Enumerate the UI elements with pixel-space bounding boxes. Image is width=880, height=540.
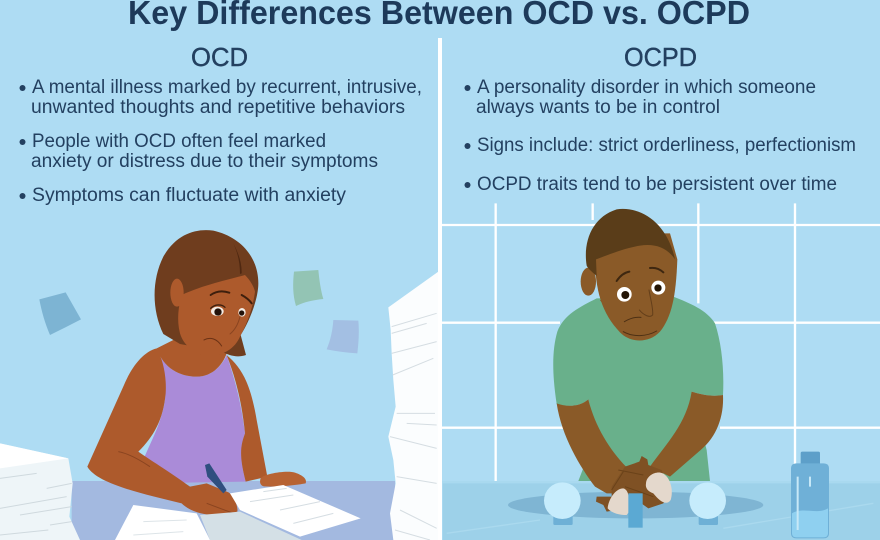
- hands: [596, 456, 670, 512]
- sticky note blue: [39, 292, 81, 335]
- face: [595, 233, 677, 341]
- bullet 2: Signs include: strict orderliness, perfectionism: [477, 135, 856, 156]
- bullet 3: OCPD traits tend to be persistent over time: [477, 174, 837, 195]
- sticky note purple: [327, 320, 359, 353]
- eyes: [211, 307, 246, 317]
- panel divider: [438, 38, 442, 540]
- ear: [581, 268, 596, 296]
- counter: [443, 481, 880, 540]
- hair: [586, 209, 675, 276]
- faucet: [628, 493, 643, 528]
- document on desk: [230, 485, 361, 537]
- right arm: [227, 355, 267, 482]
- eyes: [617, 281, 665, 302]
- panel: OCPD illustration, man washing hands: [442, 203, 880, 540]
- right arm: [650, 392, 723, 477]
- panel: OCD text: [20, 42, 422, 206]
- bullet 2: People with OCD often feel marked: [32, 131, 326, 152]
- paper stack left: [0, 443, 80, 540]
- heading: OCPD: OCPD: [624, 42, 697, 72]
- desk: [72, 481, 395, 540]
- faucet knob left: [544, 482, 581, 525]
- bullet 1: always wants to be in control: [476, 97, 720, 118]
- shirt: [553, 297, 723, 481]
- heading: OCD: OCD: [191, 42, 248, 72]
- faucet knob right: [689, 482, 726, 525]
- dress: [137, 348, 246, 483]
- bullet 2: [20, 131, 378, 172]
- brows, nose and mouth: [617, 268, 663, 336]
- soap foam: [646, 473, 672, 503]
- face: [178, 275, 255, 356]
- bathroom tile wall: [442, 203, 880, 482]
- bullet 3: Symptoms can fluctuate with anxiety: [32, 185, 347, 206]
- ear: [170, 279, 184, 307]
- woman: [87, 230, 306, 515]
- hair: [155, 230, 258, 356]
- pen: [205, 463, 227, 493]
- bullet 1: [20, 77, 422, 118]
- panel: OCPD text: [464, 42, 856, 195]
- bullet 2: anxiety or distress due to their symptoms: [31, 151, 378, 172]
- paper stack right: [388, 272, 440, 540]
- left arm: [87, 348, 237, 515]
- open notebook: [115, 505, 302, 540]
- man: [553, 209, 723, 515]
- panel: OCD illustration, woman writing among paper stacks: [0, 230, 440, 540]
- bullet 1: A personality disorder in which someone: [477, 77, 816, 98]
- neck: [600, 300, 660, 328]
- neck: [157, 337, 227, 377]
- bullet 1: [464, 77, 816, 118]
- brows, nose and mouth: [204, 291, 252, 346]
- hand on desk: [260, 472, 306, 487]
- basin: [508, 492, 763, 518]
- bullet 1: A mental illness marked by recurrent, intrusive,: [32, 77, 422, 98]
- left arm: [557, 399, 626, 493]
- soap bottle: [791, 452, 829, 538]
- sticky note green: [293, 270, 323, 306]
- bullet 1: unwanted thoughts and repetitive behaviors: [31, 97, 405, 118]
